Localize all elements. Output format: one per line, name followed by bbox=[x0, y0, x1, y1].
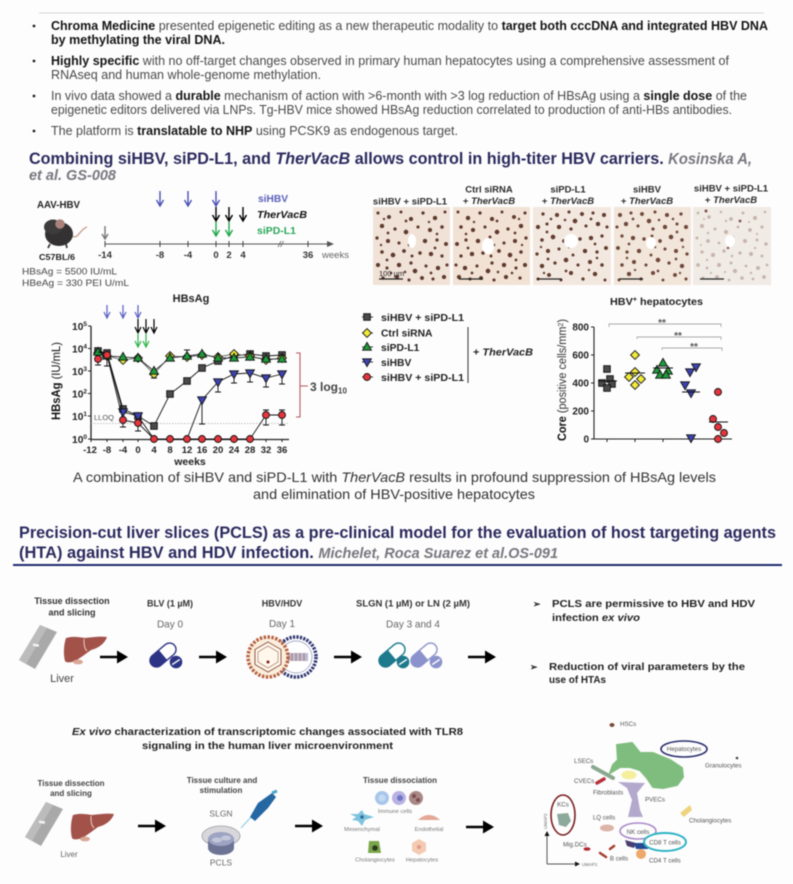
step: tissue dissection bbox=[19, 596, 110, 685]
axes: 0 bbox=[583, 434, 589, 446]
legend: treatment groups bbox=[362, 313, 534, 384]
cluster: CVECs bbox=[597, 779, 604, 783]
step: tissue culture: PCLS bbox=[210, 858, 232, 868]
chart title: hepatocytes bbox=[637, 296, 703, 308]
text: conclusion: A combination of siHBV and siPD-L1 with TherVacB results in profound suppression of HBsAg levels bbox=[73, 469, 716, 485]
bullet: Chroma Medicine: by methylating the viral DNA. bbox=[51, 33, 225, 47]
step: tissue dissection: Tissue dissection bbox=[38, 779, 105, 788]
arrow bbox=[199, 650, 227, 664]
series: siHBV + siPD-L1 (grey squares) bbox=[95, 348, 285, 429]
cluster: LSECs bbox=[593, 767, 613, 778]
axes bbox=[72, 321, 289, 468]
axes: 1 bbox=[83, 411, 87, 418]
step: SLGN or LN bbox=[356, 598, 470, 670]
significance brackets: ** bbox=[674, 331, 682, 342]
axes: 10 bbox=[72, 344, 83, 356]
text: HTA finding: use of HTAs bbox=[549, 674, 606, 686]
step: tissue culture: SLGN bbox=[209, 808, 233, 818]
axes: 200 bbox=[572, 406, 589, 418]
bullet: Chroma Medicine: Chroma Medicine presented epigenetic editing as a new therapeutic modality to target both cccDNA and integrated HBV DNA bbox=[51, 19, 768, 33]
column labels: siHBV + siPD-L1 bbox=[694, 184, 769, 194]
axes: 20 bbox=[213, 445, 223, 456]
step: tissue dissection: Tissue dissection bbox=[34, 596, 110, 606]
axes: 10 bbox=[72, 322, 83, 333]
y axis title: 2 bbox=[556, 323, 565, 327]
arrow bbox=[138, 820, 166, 832]
cluster labels: Granulocytes bbox=[705, 762, 741, 770]
label: AAV-HBV: AAV-HBV bbox=[37, 200, 80, 211]
divider: section rule bbox=[13, 564, 782, 566]
axes: 10 bbox=[72, 367, 83, 378]
cluster labels: Cholangiocytes bbox=[689, 818, 731, 824]
outline: NK cells bbox=[620, 823, 656, 839]
bullet: Chroma Medicine bbox=[33, 19, 768, 47]
legend: schedule labels: siHBV bbox=[258, 193, 288, 205]
step: tissue dissociation: Cholangiocytes bbox=[355, 858, 395, 864]
panel: PCLS workflow bbox=[19, 596, 755, 686]
arrows: dosing schedule bbox=[102, 191, 246, 239]
axes: 3 bbox=[83, 366, 87, 373]
cluster labels: HSCs bbox=[620, 721, 636, 728]
UMAP axes: UMAP2 bbox=[543, 813, 548, 829]
axes: -4 bbox=[119, 445, 128, 456]
axes: 400 bbox=[572, 378, 589, 390]
timeline axis: 36 bbox=[303, 250, 313, 261]
column labels bbox=[373, 184, 769, 208]
heading: PCLS bbox=[19, 523, 776, 562]
panel: liver histology micrographs bbox=[373, 184, 771, 285]
micrograph 4 bbox=[614, 207, 691, 285]
step: tissue dissection: and slicing bbox=[50, 789, 92, 798]
step: BLV: Day 0 bbox=[157, 620, 183, 630]
cluster labels: CVECs bbox=[574, 778, 594, 785]
axes: 10 bbox=[72, 412, 83, 423]
step: tissue dissociation: Immune cells bbox=[378, 809, 412, 815]
bullet: highly specific: RNAseq and human whole-genome methylation. bbox=[51, 68, 321, 82]
group: grey squares bbox=[598, 366, 617, 391]
cluster labels: CD4 T cells bbox=[649, 858, 681, 864]
cluster labels: LQ cells bbox=[593, 814, 615, 822]
bullet: highly specific: Highly specific with no off-target changes observed in primary human hepatocytes using a comprehensive assessment of bbox=[51, 54, 729, 68]
chart: HBV+ hepatocytes dot plot bbox=[556, 296, 732, 446]
column labels: siHBV bbox=[633, 184, 662, 196]
legend: treatment groups: + TherVacB bbox=[473, 348, 534, 358]
legend: schedule labels: siPD-L1 bbox=[257, 225, 296, 237]
step: SLGN or LN: Day 3 and 4 bbox=[386, 620, 440, 630]
step: tissue culture: Tissue culture and bbox=[187, 776, 257, 785]
cluster labels: CD8 T cells bbox=[649, 840, 681, 846]
step: HBV/HDV virus: HBV/HDV bbox=[262, 598, 302, 608]
cluster labels: NK cells bbox=[627, 829, 649, 836]
step: tissue dissociation: Hepatocytes bbox=[406, 858, 438, 864]
series: siHBV (blue triangles) bbox=[98, 352, 286, 439]
cluster labels: Fibroblasts bbox=[593, 790, 623, 796]
label: C57BL/6: C57BL/6 bbox=[39, 252, 75, 262]
arrow bbox=[100, 650, 128, 664]
error bars bbox=[95, 350, 285, 431]
LLOQ line: LLOQ bbox=[94, 413, 114, 422]
text: HTA finding bbox=[530, 661, 745, 686]
timeline axis: -14 bbox=[98, 250, 113, 261]
axes: 800 bbox=[572, 322, 589, 334]
axes: 36 bbox=[277, 445, 287, 456]
y axis title: Core (positive cells/mm bbox=[557, 322, 569, 441]
axes: -12 bbox=[83, 445, 97, 456]
cluster labels: Mig.DCs bbox=[563, 842, 587, 848]
column labels: siHBV + siPD-L1 bbox=[373, 196, 448, 208]
icon: pipette bbox=[241, 791, 277, 828]
column labels: + TherVacB bbox=[463, 196, 515, 207]
series: siPD-L1 (green triangles) bbox=[94, 347, 286, 374]
column labels: + TherVacB bbox=[542, 196, 594, 207]
step: BLV bbox=[147, 598, 193, 670]
column labels: + TherVacB bbox=[621, 196, 673, 207]
axes: 16 bbox=[197, 445, 207, 456]
axes: 8 bbox=[167, 445, 173, 456]
step: HBV/HDV virus bbox=[248, 598, 316, 677]
step: tissue dissociation: Endothelial bbox=[415, 827, 443, 833]
cluster labels: Hepatocytes bbox=[667, 746, 701, 753]
axes: 12 bbox=[182, 445, 192, 456]
chart title: HBV bbox=[610, 296, 632, 308]
legend: treatment groups: siHBV + siPD-L1 bbox=[381, 313, 464, 324]
step: tissue culture: stimulation bbox=[200, 786, 242, 795]
step: tissue dissection: and slicing bbox=[48, 608, 96, 618]
cluster labels: B cells bbox=[610, 856, 628, 862]
chart title: + bbox=[633, 296, 637, 304]
timeline axis bbox=[98, 241, 349, 261]
axes: 28 bbox=[245, 445, 255, 456]
heading: combining siHBV: Combining siHBV, siPD-L1, and TherVacB allows control in high-titer HBV carriers. Kosinska A, bbox=[29, 149, 752, 168]
series: siHBV + siPD-L1 + TherVacB (red circles) bbox=[94, 352, 286, 442]
axes: 2 bbox=[83, 388, 87, 396]
text: baseline titers: HBeAg = 330 PEI U/mL bbox=[22, 278, 130, 289]
icon: culture dish bbox=[202, 826, 240, 855]
bullet: in vivo data bbox=[33, 89, 747, 117]
cluster labels bbox=[557, 721, 741, 864]
timeline axis: weeks bbox=[321, 250, 349, 261]
step: tissue dissociation: Tissue dissociation bbox=[363, 776, 437, 785]
legend: treatment groups: siHBV + siPD-L1 bbox=[381, 373, 464, 384]
column labels: + TherVacB bbox=[705, 195, 757, 206]
step: tissue dissociation bbox=[344, 776, 443, 864]
cluster: LQ cells bbox=[600, 824, 614, 832]
cluster: HSCs bbox=[610, 723, 614, 727]
heading: PCLS: (HTA) against HBV and HDV infection. Michelet, Roca Suarez et al.OS-091 bbox=[19, 543, 558, 562]
step: BLV: BLV (1 µM) bbox=[147, 598, 193, 608]
icon: mouse bbox=[44, 219, 87, 248]
callout: 3 log10 bracket: 10 bbox=[338, 386, 347, 396]
column labels: Ctrl siRNA bbox=[465, 184, 513, 196]
cluster: B cells bbox=[600, 846, 614, 857]
step: SLGN or LN: SLGN (1 µM) or LN (2 µM) bbox=[356, 598, 470, 608]
heading: ex vivo characterization bbox=[72, 726, 463, 752]
panel: TLR8 workflow bbox=[25, 776, 494, 868]
UMAP axes: UMAP1 bbox=[582, 862, 598, 867]
cluster: NK cells bbox=[625, 840, 636, 848]
text: permissive finding: ➢ bbox=[533, 599, 541, 609]
panel: epigenetic editing bullets bbox=[33, 13, 768, 138]
axes: -8 bbox=[103, 445, 111, 456]
legend: treatment groups: Ctrl siRNA bbox=[381, 328, 433, 340]
cluster labels: KCs bbox=[557, 802, 569, 808]
group: blue triangles bbox=[681, 364, 700, 443]
cluster: KCs bbox=[557, 813, 571, 827]
cluster: granulocytes bbox=[736, 757, 738, 759]
panel: treatment timeline bbox=[22, 191, 349, 289]
bullet: platform: The platform is translatable to NHP using PCSK9 as endogenous target. bbox=[51, 124, 458, 138]
timeline axis: -4 bbox=[184, 250, 193, 261]
series: Ctrl siRNA (yellow diamonds) bbox=[94, 349, 286, 378]
group: green triangles bbox=[653, 358, 673, 378]
heading: combining siHBV: et al. GS-008 bbox=[29, 167, 117, 184]
bullet: highly specific bbox=[33, 54, 729, 82]
axes: 5 bbox=[83, 321, 87, 328]
heading: ex vivo characterization: Ex vivo characterization of transcriptomic changes associated with TLR8 bbox=[72, 726, 463, 738]
cluster: CD4 T cells bbox=[636, 849, 646, 859]
heading: ex vivo characterization: signaling in the human liver microenvironment bbox=[142, 740, 394, 752]
chart: HBsAg time course bbox=[49, 293, 347, 468]
micrograph 1 bbox=[373, 207, 450, 285]
column labels: siPD-L1 bbox=[550, 184, 586, 196]
cluster: PVECs bbox=[618, 782, 645, 817]
timeline axis: -8 bbox=[156, 250, 164, 261]
step: tissue dissociation: Mesenchymal bbox=[344, 827, 380, 833]
outline: hepatocytes bbox=[661, 741, 707, 757]
axes: 4 bbox=[151, 445, 157, 456]
arrow bbox=[295, 820, 323, 832]
axes: 600 bbox=[572, 350, 589, 362]
timeline axis: 2 bbox=[226, 250, 232, 261]
micrograph 5 bbox=[693, 207, 771, 285]
text: baseline titers: HBsAg = 5500 IU/mL bbox=[22, 266, 118, 278]
arrow bbox=[468, 650, 496, 664]
heading: combining siHBV bbox=[29, 149, 752, 184]
text: permissive finding: infection ex vivo bbox=[552, 612, 641, 624]
micrograph 2 bbox=[453, 207, 530, 285]
timeline axis: 4 bbox=[240, 250, 246, 261]
step: tissue culture bbox=[187, 776, 277, 868]
micrograph 1: 100 µm bbox=[379, 269, 404, 278]
legend: schedule labels: TherVacB bbox=[257, 209, 307, 221]
significance brackets: ** bbox=[658, 318, 666, 329]
cluster: CD8 T cells bbox=[634, 843, 648, 849]
text: baseline titers bbox=[22, 266, 130, 289]
axes bbox=[572, 322, 732, 446]
text: HTA finding: Reduction of viral parameters by the bbox=[549, 661, 745, 673]
micrograph 3 bbox=[533, 207, 611, 285]
axes: 0 bbox=[135, 445, 141, 456]
text: conclusion bbox=[73, 469, 716, 502]
arrow bbox=[466, 820, 494, 834]
chart: UMAP of liver cell types bbox=[543, 721, 741, 867]
bullet: in vivo data: epigenetic editors delivered via LNPs. Tg-HBV mice showed HBsAg reduction correlated to production of anti-HBs antibodies. bbox=[51, 103, 732, 117]
cluster: hepatocytes bbox=[610, 743, 683, 788]
group: yellow diamonds bbox=[625, 351, 645, 389]
callout: 3 log10 bracket bbox=[296, 353, 347, 417]
axes: weeks bbox=[173, 456, 206, 468]
step: tissue dissection: Liver bbox=[60, 850, 78, 859]
legend: treatment groups: siPD-L1 bbox=[381, 343, 420, 354]
timeline axis: 0 bbox=[213, 250, 219, 261]
axes: 10 bbox=[72, 435, 83, 446]
axes: 24 bbox=[229, 445, 240, 456]
significance brackets: ** bbox=[690, 342, 698, 353]
cluster: Mig DCs bbox=[584, 847, 590, 851]
cluster labels: LSECs bbox=[574, 758, 593, 765]
outline: CD8 T cells bbox=[644, 833, 686, 851]
text: permissive finding bbox=[533, 598, 755, 624]
axes: 4 bbox=[83, 344, 87, 350]
text: conclusion: and elimination of HBV-positive hepatocytes bbox=[253, 486, 535, 502]
step: tissue dissection bbox=[25, 779, 114, 859]
cluster: yellow subset bbox=[622, 770, 636, 780]
cluster: cholangiocytes bbox=[680, 805, 692, 817]
cluster labels: PVECs bbox=[645, 796, 665, 804]
step: tissue dissection: Liver bbox=[50, 673, 74, 685]
group: red circles bbox=[709, 388, 728, 442]
bullet: in vivo data: In vivo data showed a durable mechanism of action with >6-month with >3 log reduction of HBsAg using a single dose of the bbox=[51, 89, 747, 103]
step: HBV/HDV virus: Day 1 bbox=[269, 619, 295, 630]
legend: treatment groups: siHBV bbox=[381, 358, 411, 369]
axes: 0 bbox=[83, 434, 87, 441]
outline: KCs bbox=[551, 795, 575, 835]
legend: schedule labels bbox=[257, 193, 307, 237]
UMAP axes bbox=[543, 813, 598, 867]
axes: 10 bbox=[72, 390, 83, 400]
text: permissive finding: PCLS are permissive to HBV and HDV bbox=[552, 598, 755, 610]
chart title: HBsAg bbox=[173, 293, 209, 305]
significance brackets bbox=[609, 318, 722, 353]
text: HTA finding: ➢ bbox=[530, 662, 538, 672]
arrows: chart dosing bbox=[104, 305, 157, 347]
callout: 3 log10 bracket: 3 log bbox=[310, 380, 338, 394]
y axis title: ) bbox=[557, 319, 569, 323]
axes: 32 bbox=[261, 445, 271, 456]
arrow bbox=[334, 650, 362, 664]
y axis title: HBsAg (IU/mL) bbox=[49, 342, 63, 420]
heading: PCLS: Precision-cut liver slices (PCLS) as a pre-clinical model for the evaluation of host targeting agents bbox=[19, 523, 776, 542]
